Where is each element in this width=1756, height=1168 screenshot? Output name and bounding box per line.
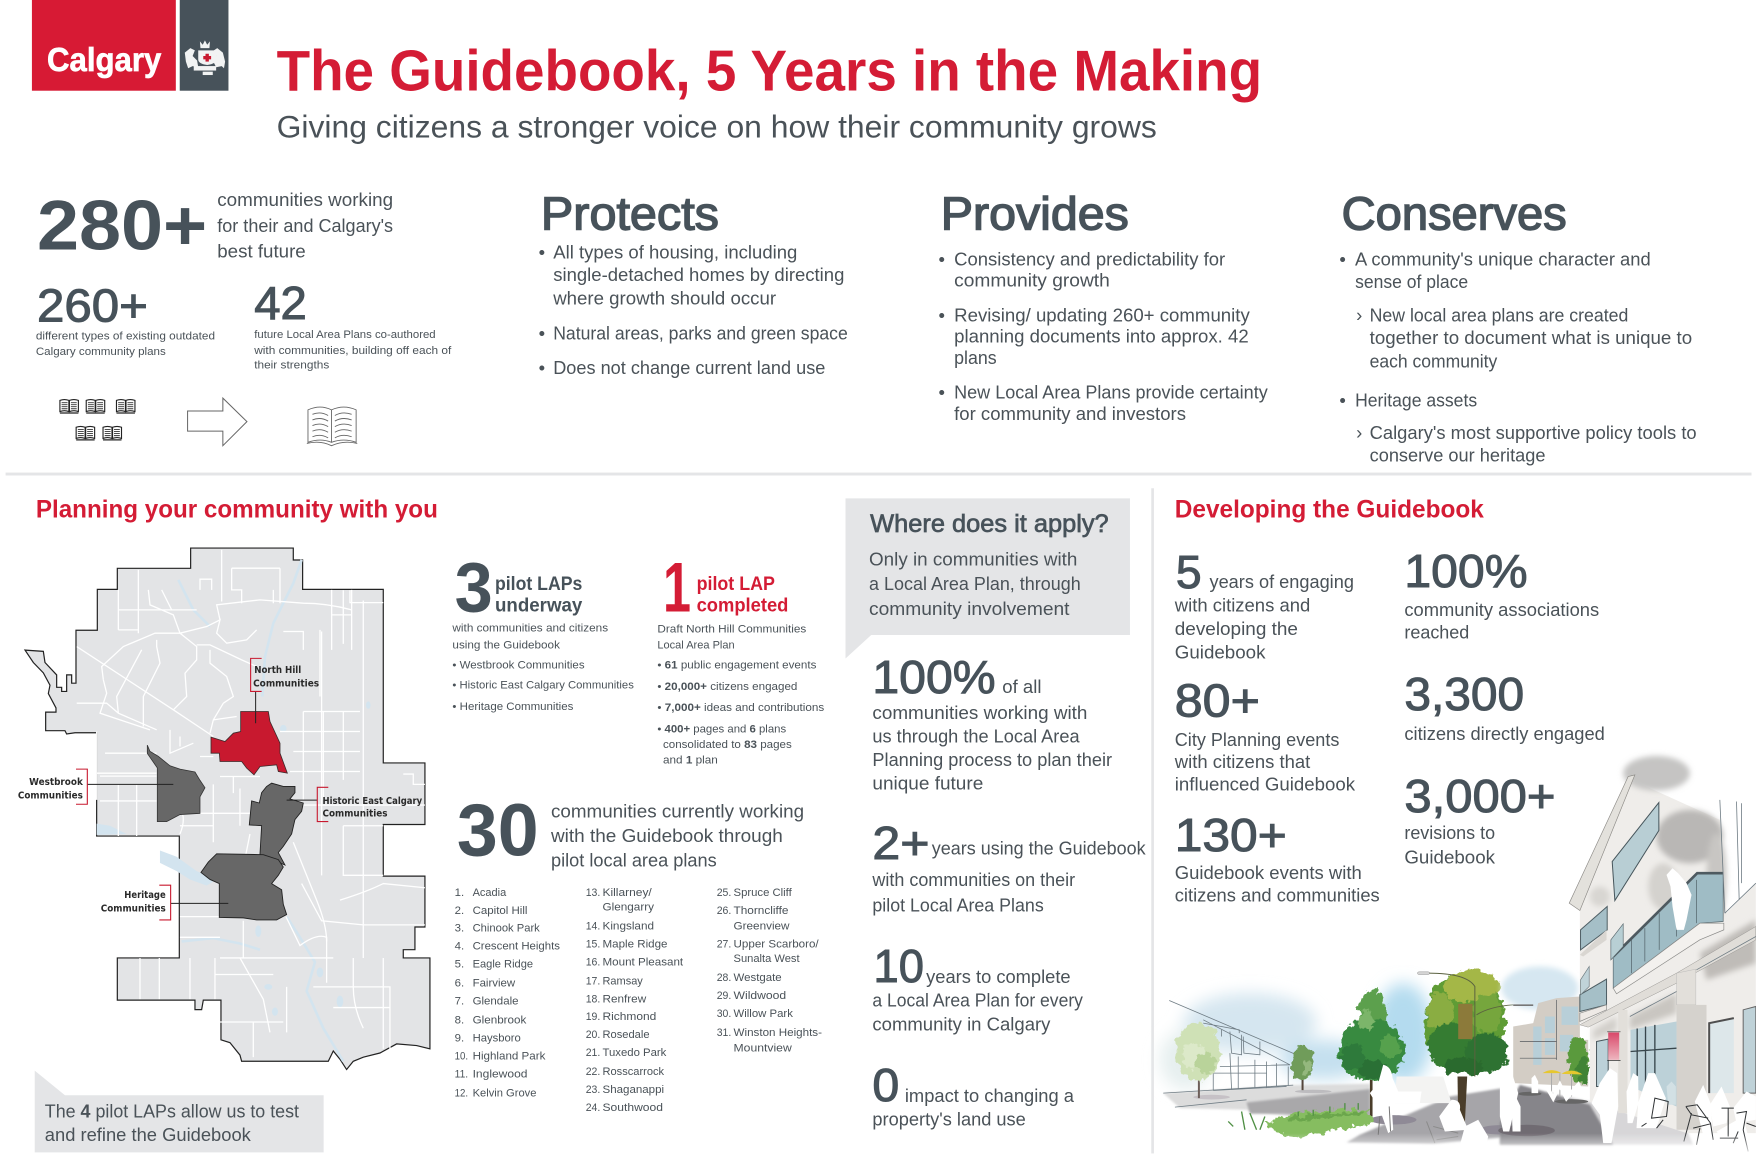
list: communities 1 to 12: 4. [455,941,464,953]
callout: Where does it apply: community involvement [869,598,1070,619]
list: communities 13 to 24: Southwood [603,1102,663,1114]
list: communities 1 to 12: Chinook Park [473,923,540,935]
list: protects bullets: single-detached homes by directing [553,264,844,285]
tree: large street tree [1418,970,1513,1123]
panel: 3 pilot LAPs underway: underway [495,595,583,616]
stat: 260+ existing plans: different types of existing outdated [36,330,215,342]
stat: 42 future plans: future Local Area Plans co-authored [254,329,436,341]
map label: North Hill: Communities [253,678,319,689]
panel: 30 communities [457,789,804,872]
panel: 30 communities: pilot local area plans [551,850,717,871]
stat: 280+ communities [37,186,393,265]
panel: 3 pilot LAPs underway: • Westbrook Communities [452,660,585,672]
panel: 3 pilot LAPs underway: using the Guidebook [452,639,560,651]
map label: North Hill: North Hill [254,665,301,676]
main building facade [1569,756,1756,1133]
list: communities 25 to 31: 25. [717,887,731,899]
stat: 5 years of engaging: years of engaging [1209,571,1354,592]
list: communities 25 to 31: 26. [717,905,731,917]
list: conserves bullets: › [1356,304,1362,325]
list: communities 13 to 24: Rosscarrock [603,1066,664,1078]
panel: 3 pilot LAPs underway: pilot LAPs [495,574,582,595]
list: provides bullets: New Local Area Plans provide certainty [954,382,1268,403]
stat: 3,000+ revisions: 3,000+ [1404,770,1556,822]
person on balcony [1667,868,1692,930]
ground fade [1159,1133,1756,1157]
logo: City of Calgary [32,0,228,91]
storefront glazing [1597,1006,1756,1113]
map label: North Hill [253,665,319,689]
list: communities 13 to 24: 21. [586,1047,600,1059]
upper window band [1612,803,1659,901]
stat: 0 impact [872,1059,1075,1129]
list: communities 1 to 12: 2. [455,905,464,917]
panel: 30 communities: 30 [457,789,539,872]
list: communities 1 to 12: Eagle Ridge [473,959,533,971]
sky wash [1160,983,1433,1090]
list: provides bullets: • [938,382,945,403]
panel: 1 pilot LAP completed: and 1 plan [663,755,718,767]
stat: 2+ years: years using the Guidebook [932,837,1146,858]
callout: Where does it apply: Where does it apply? [870,511,1109,538]
list: communities 25 to 31: Spruce Cliff [734,887,793,899]
panel: 3 pilot LAPs underway: 3 [455,547,493,626]
list: communities 25 to 31: Westgate [734,972,782,984]
cyclist silhouette [1370,1065,1398,1135]
tree: distant right [1568,1036,1589,1083]
stat: 2+ years: with communities on their [871,869,1075,890]
list: protects bullets: where growth should occur [552,288,776,309]
list: provides bullets: • [938,248,945,269]
stat: 80+ city planning events [1174,675,1356,795]
stat: 42 future plans: 42 [254,277,307,329]
list: communities 1 to 12: Capitol Hill [473,905,527,917]
heading: Developing the Guidebook: Developing the Guidebook [1175,495,1485,523]
panel: 1 pilot LAP completed: • 400+ pages and 6 plans [657,723,787,735]
stat: 5 years of engaging [1174,546,1354,662]
list: conserves bullets: Heritage assets [1355,390,1477,411]
stat: 100% community associations: reached [1404,621,1469,642]
list: protects bullets: Natural areas, parks and green space [553,322,848,343]
panel: 1 pilot LAP completed: consolidated to 83 pages [663,739,792,751]
stat: 260+ existing plans: Calgary community plans [36,346,166,358]
upper right building linework [1630,800,1756,1016]
map label: Heritage: Heritage [124,890,166,901]
list: communities 13 to 24: 13. [586,887,600,899]
callout: Where does it apply: Only in communities with [869,549,1077,570]
stat: 3,000+ revisions [1404,770,1556,867]
map label: Westbrook: Westbrook [29,777,83,788]
list: conserves bullets: together to document what is unique to [1370,327,1692,348]
map label: Heritage [101,890,166,915]
tree: small [1292,1046,1313,1090]
list: communities 13 to 24: Mount Pleasant [603,956,684,968]
stat: 2+ years: pilot Local Area Plans [872,895,1044,916]
list: conserves bullets: sense of place [1355,271,1468,292]
balcony glazing [1580,873,1723,1011]
panel: 1 pilot LAP completed: Draft North Hill Communities [657,624,807,636]
panel: 30 communities: with the Guidebook through [550,825,783,846]
panel: 3 pilot LAPs underway: • Heritage Communities [452,701,574,713]
tree: pale [1176,1023,1221,1098]
stat: 0 impact: 0 [872,1059,899,1111]
map label: Westbrook [18,777,83,801]
stat: 130+ guidebook events: Guidebook events with [1175,862,1362,883]
stat: 3,300 citizens [1404,668,1605,744]
list: communities 1 to 12: Inglewood [473,1068,527,1080]
list: communities 25 to 31: Sunalta West [734,953,800,965]
panel: 1 pilot LAP completed: • 20,000+ citizens engaged [657,681,797,693]
list: communities 13 to 24: 23. [586,1084,600,1096]
stat: 100% of all communities: Planning process to plan their [872,749,1112,770]
list: protects bullets: All types of housing, including [553,242,797,263]
map label: Historic East Calgary: Communities [323,808,388,819]
list: protects bullets: • [539,242,545,263]
callout: 4 pilot LAPs: and refine the Guidebook [45,1124,252,1145]
list: communities 13 to 24: 16. [586,956,600,968]
panel: 3 pilot LAPs underway [451,547,634,713]
stat: 42 future plans [253,277,452,371]
list: communities 13 to 24 [586,887,684,1114]
stat: 2+ years [871,817,1146,916]
map: Calgary communities [18,548,430,1070]
stat: 100% of all communities: of all [1002,676,1042,697]
heading: Protects: Protects [541,188,719,240]
pedestrians: white silhouettes [1500,1068,1756,1143]
stat: 100% community associations [1404,545,1599,642]
stat: 2+ years: 2+ [872,817,930,869]
stat: 260+ existing plans: 260+ [37,279,148,331]
list: communities 1 to 12: 1. [455,887,464,899]
list: communities 1 to 12: 6. [455,978,464,990]
stat: 100% community associations: community associations [1404,599,1599,620]
map label: Historic East Calgary: Historic East Calgary [323,796,423,807]
callout: Where does it apply: a Local Area Plan, through [869,573,1081,594]
stat: 10 years: 10 [874,940,924,992]
panel: Protects [539,188,848,378]
panel: 1 pilot LAP completed: Local Area Plan [657,639,735,651]
list: communities 13 to 24: Killarney/ [603,887,653,899]
stat: 130+ guidebook events: 130+ [1175,809,1287,861]
list: provides bullets: • [938,304,945,325]
panel: 1 pilot LAP completed [657,547,825,767]
list: communities 25 to 31: Wildwood [734,990,786,1002]
stat: 100% community associations: 100% [1404,545,1528,597]
panel: 1 pilot LAP completed: 1 [663,547,691,626]
list: communities 13 to 24: 15. [586,938,600,950]
list: communities 13 to 24: 20. [586,1029,600,1041]
stat: 10 years: a Local Area Plan for every [872,990,1084,1011]
stat: 100% of all communities [872,651,1112,793]
car [1393,1076,1452,1103]
stat: 80+ city planning events: with citizens that [1174,751,1310,772]
list: communities 25 to 31: Thorncliffe [734,905,788,917]
list: protects bullets: • [539,357,545,378]
list: provides bullets [938,248,1268,424]
stat: 280+ communities: for their and Calgary's [217,215,393,236]
stat: 80+ city planning events: City Planning events [1175,729,1339,750]
panel: 1 pilot LAP completed: • 7,000+ ideas and contributions [657,702,825,714]
stat: 100% of all communities: us through the Local Area [872,725,1080,746]
list: conserves bullets: • [1339,248,1346,269]
stat: 100% of all communities: 100% [872,651,996,703]
list: communities 25 to 31: 29. [717,990,731,1002]
stat: 3,300 citizens: citizens directly engaged [1404,723,1605,744]
list: conserves bullets: conserve our heritage [1370,444,1545,465]
list: communities 1 to 12: Kelvin Grove [473,1087,536,1099]
arrow: consolidation [188,398,247,446]
stat: 3,000+ revisions: revisions to [1404,822,1495,843]
list: communities 1 to 12: 8. [455,1015,464,1027]
stat: 3,000+ revisions: Guidebook [1404,846,1496,867]
list: communities 25 to 31: 30. [717,1008,731,1020]
list: communities 1 to 12: Acadia [473,887,507,899]
stroller and cafe furniture [1642,1098,1756,1151]
region: Westbrook [147,745,205,822]
map label: Historic East Calgary [323,796,423,819]
callout: 4 pilot LAPs: The 4 pilot LAPs allow us to test [45,1101,299,1122]
list: communities 1 to 12: Glenbrook [473,1015,527,1027]
list: communities 13 to 24: 18. [586,993,600,1005]
region: Heritage [201,854,287,920]
list: communities 13 to 24: Kingsland [603,920,654,932]
column [1677,969,1707,1130]
slabs and soffit [1580,923,1756,1027]
road and sidewalk [1498,1085,1693,1145]
stat: 130+ guidebook events [1175,809,1380,905]
hedge: green planting [1228,1103,1372,1137]
list: conserves bullets: each community [1370,350,1498,371]
list: conserves bullets: › [1356,422,1362,443]
left building linework [1163,1000,1297,1107]
list: communities 1 to 12: 11. [455,1068,468,1080]
map: northern road network [77,550,360,800]
list: communities 1 to 12: 7. [455,996,464,1008]
stat: 100% of all communities: communities working with [872,702,1087,723]
list: communities 1 to 12: Fairview [473,978,516,990]
list: conserves bullets: • [1339,390,1346,411]
list: communities 1 to 12: Haysboro [473,1032,521,1044]
list: conserves bullets: A community's unique character and [1355,248,1651,269]
panel: Conserves [1339,188,1697,465]
panel: 1 pilot LAP completed: completed [697,595,788,616]
title: The Guidebook, 5 Years in the Making [277,40,1262,104]
stat: 0 impact: property's land use [872,1108,1026,1129]
panel: 3 pilot LAPs underway: with communities and citizens [451,623,609,635]
list: conserves bullets [1339,248,1697,465]
stat: 280+ communities: best future [217,241,306,262]
list: communities 13 to 24: 22. [586,1066,600,1078]
stat: 10 years: community in Calgary [872,1013,1051,1034]
list: provides bullets: for community and investors [954,403,1186,424]
list: communities 1 to 12: Crescent Heights [473,941,560,953]
list: communities 13 to 24: Glengarry [603,901,654,913]
stat: 260+ existing plans [36,279,215,358]
logo: City of Calgary: Calgary [47,42,162,79]
stat: 3,300 citizens: 3,300 [1404,668,1524,720]
list: communities 13 to 24: 19. [586,1011,600,1023]
list: communities 25 to 31: Willow Park [734,1008,793,1020]
list: communities 13 to 24: Richmond [603,1011,656,1023]
stat: 42 future plans: their strengths [254,359,330,371]
list: communities 25 to 31 [717,887,822,1055]
stat: 280+ communities: 280+ [37,186,207,265]
heading: Provides: Provides [941,188,1129,240]
list: communities 25 to 31: 28. [717,972,731,984]
list: communities 1 to 12: 9. [455,1032,464,1044]
illustration: watercolour street scene [1159,756,1756,1157]
list: communities 1 to 12: Glendale [473,996,519,1008]
callout: Where does it apply [846,498,1130,658]
list: communities 1 to 12: Highland Park [473,1050,546,1062]
icon: open book [307,407,357,446]
stat: 280+ communities: communities working [217,189,393,210]
stat: 130+ guidebook events: citizens and communities [1175,884,1380,905]
stat: 5 years of engaging: developing the [1175,618,1298,639]
list: conserves bullets: New local area plans are created [1370,304,1628,325]
list: communities 13 to 24: Ramsay [603,975,643,987]
list: communities 13 to 24: 14. [586,920,600,932]
subtitle: Giving citizens a stronger voice on how their community grows [277,109,1157,145]
list: communities 13 to 24: Maple Ridge [603,938,667,950]
list: communities 25 to 31: Upper Scarboro/ [734,938,819,950]
panel: 1 pilot LAP completed: • 61 public engagement events [657,660,817,672]
stat: 100% of all communities: unique future [872,772,983,793]
stat: 10 years: years to complete [926,966,1071,987]
list: communities 25 to 31: Mountview [734,1043,793,1055]
stat: 5 years of engaging: 5 [1176,546,1202,598]
list: communities 25 to 31: 31. [717,1027,731,1039]
seated figures and bench [1427,1100,1488,1151]
list: protects bullets: Does not change current land use [553,357,825,378]
heading: Planning your community with you: Planning your community with you [36,495,438,523]
list: communities 13 to 24: Renfrew [603,993,647,1005]
ground and road [1163,1084,1520,1144]
panel: Provides [938,188,1268,424]
list: communities 1 to 12: 10. [455,1050,468,1062]
region: Historic East Calgary [249,783,303,865]
stat: 80+ city planning events: 80+ [1175,675,1260,727]
list: communities 13 to 24: 17. [586,975,600,987]
list: communities 13 to 24: Tuxedo Park [603,1047,667,1059]
region: North Hill [211,712,287,775]
list: provides bullets: planning documents into approx. 42 [954,326,1249,347]
list: provides bullets: Revising/ updating 260+ community [954,304,1251,325]
stat: 5 years of engaging: with citizens and [1174,594,1310,615]
list: communities 1 to 12: 12. [455,1087,468,1099]
stat: 10 years [872,940,1084,1034]
stat: 42 future plans: with communities, building off each of [253,345,452,357]
map label: Westbrook: Communities [18,790,83,801]
list: communities 13 to 24: 24. [586,1102,600,1114]
list: communities 1 to 12: 3. [455,923,464,935]
list: communities 25 to 31: Winston Heights- [734,1027,822,1039]
list: protects bullets: • [539,322,545,343]
list: communities 25 to 31: 27. [717,938,731,950]
list: provides bullets: Consistency and predictability for [954,248,1225,269]
tree: medium green [1339,990,1404,1116]
far buildings [1513,996,1588,1086]
callout: 4 pilot LAPs [35,1071,324,1152]
yellow cafe umbrellas [1543,1070,1583,1098]
stat: 0 impact: impact to changing a [905,1085,1075,1106]
heading: Conserves: Conserves [1342,188,1567,240]
panel: 3 pilot LAPs underway: • Historic East Calgary Communities [452,680,634,692]
map label: Heritage: Communities [101,904,166,915]
list: communities 13 to 24: Rosedale [603,1029,650,1041]
list: provides bullets: plans [954,347,997,368]
list: communities 1 to 12 [455,887,560,1099]
icon: five small books [60,400,135,440]
panel: community plan numbers [36,186,452,446]
stat: 80+ city planning events: influenced Guidebook [1175,774,1356,795]
stat: 5 years of engaging: Guidebook [1175,641,1266,662]
list: communities 1 to 12: 5. [455,959,464,971]
panel: 30 communities: communities currently working [551,800,804,821]
list: conserves bullets: Calgary's most supportive policy tools to [1370,422,1697,443]
list: provides bullets: community growth [954,270,1110,291]
list: protects bullets [539,242,848,378]
far sky wash [1502,967,1578,1010]
panel: 1 pilot LAP completed: pilot LAP [697,574,775,595]
list: communities 13 to 24: Shaganappi [603,1084,664,1096]
list: communities 25 to 31: Greenview [734,920,790,932]
